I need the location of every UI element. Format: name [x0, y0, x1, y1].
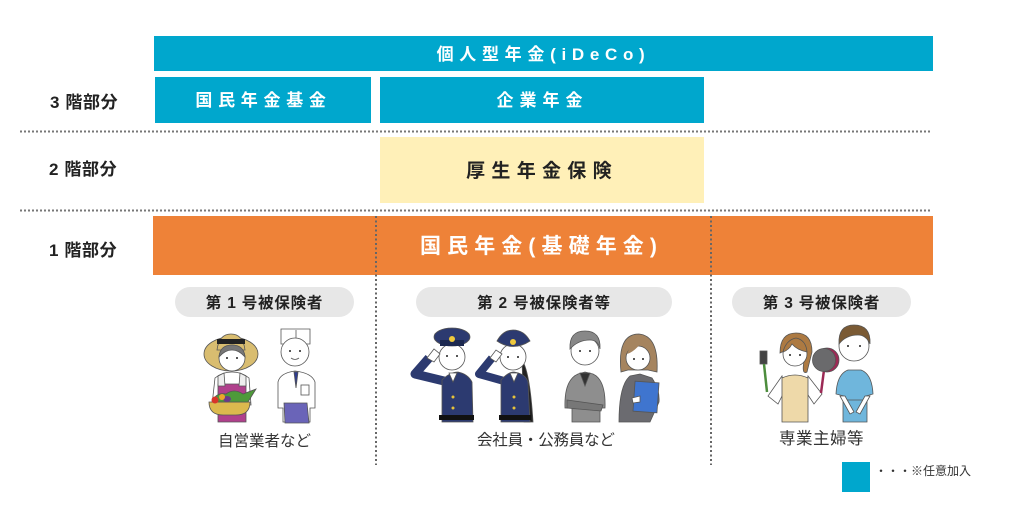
legend text: ・・・※任意加入	[875, 464, 971, 478]
category pill: type 3: 第 3 号被保険者	[763, 295, 880, 312]
category pill: type 3	[732, 287, 911, 317]
2nd floor label: 2 階部分	[49, 160, 117, 179]
caption: homemakers: 専業主婦等	[779, 430, 864, 448]
national pension fund bar	[155, 77, 371, 123]
icon: police officer	[415, 328, 474, 422]
icon: female police officer	[479, 330, 533, 422]
iDeCo bar	[154, 36, 933, 71]
corporate pension bar	[380, 77, 704, 123]
basic pension bar	[153, 216, 933, 275]
icon: househusband in blue shirt	[836, 325, 873, 422]
legend	[842, 462, 971, 492]
caption: self-employed: 自営業者など	[218, 433, 311, 450]
icon: businessman	[565, 331, 605, 422]
iDeCo bar: 個人型年金(iDeCo)	[437, 45, 650, 64]
employees pension bar	[380, 137, 704, 203]
icon: businesswoman	[619, 334, 659, 422]
category pill: type 1: 第 1 号被保険者	[206, 295, 323, 312]
basic pension bar: 国民年金(基礎年金)	[420, 235, 663, 258]
legend swatch	[842, 462, 870, 492]
corporate pension bar: 企業年金	[496, 91, 588, 110]
1st floor label: 1 階部分	[49, 241, 117, 260]
category pill: type 2: 第 2 号被保険者等	[477, 295, 611, 312]
category pill: type 1	[175, 287, 354, 317]
icon: homemaker with spatula and pan	[760, 333, 839, 422]
icon: chef	[278, 329, 315, 423]
category pill: type 2	[416, 287, 672, 317]
national pension fund bar: 国民年金基金	[195, 91, 332, 110]
icon: farmer	[204, 334, 258, 422]
caption: employees: 会社員・公務員など	[477, 432, 615, 449]
3rd floor label: 3 階部分	[50, 93, 118, 112]
employees pension bar: 厚生年金保険	[466, 160, 618, 182]
